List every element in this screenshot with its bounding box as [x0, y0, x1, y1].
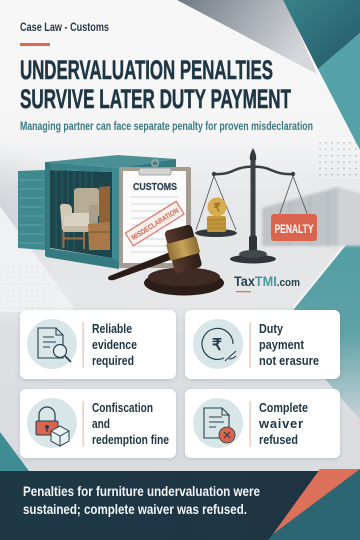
label	[258, 400, 308, 447]
label: Reliable	[92, 321, 132, 336]
coins: ₹	[214, 202, 220, 214]
card: reliable evidence	[20, 310, 176, 379]
label: payment	[259, 337, 305, 352]
gavel	[108, 224, 224, 296]
label: refused	[259, 432, 298, 447]
label: required	[92, 353, 134, 368]
warehouse backdrop	[262, 187, 360, 246]
label	[259, 321, 319, 368]
label: not erasure	[259, 353, 319, 368]
label	[92, 400, 169, 447]
footer text: Penalties for furniture undervaluation were	[23, 483, 260, 499]
icon: rupee circle	[193, 319, 243, 369]
penalty sign: PENALTY	[274, 224, 314, 236]
dot pattern	[315, 141, 358, 181]
misdeclaration stamp: MISDECLARATION	[130, 206, 180, 242]
label: Duty	[259, 321, 284, 336]
armchair	[60, 188, 99, 249]
card: waiver refused	[185, 389, 340, 458]
label: waiver	[258, 416, 303, 431]
footer text	[23, 483, 260, 517]
icon: document with cross	[193, 398, 243, 448]
title	[20, 55, 291, 114]
accent bar	[20, 43, 50, 46]
label: evidence	[92, 337, 137, 352]
label	[92, 321, 137, 368]
wooden cabinet	[88, 186, 110, 250]
icon: rupee circle: ₹	[212, 337, 222, 354]
footer text: sustained; complete waiver was refused.	[23, 501, 247, 517]
label: redemption fine	[92, 432, 169, 447]
icon: lock and box	[27, 398, 77, 448]
TaxTMI logo: TaxTMI.com	[234, 273, 300, 289]
label: Complete	[259, 400, 308, 415]
label: and	[92, 416, 110, 431]
footer band	[0, 469, 360, 540]
card: confiscation	[20, 389, 176, 458]
icon: document with magnifier	[27, 319, 77, 369]
card: duty payment	[185, 310, 340, 379]
balance scale	[195, 148, 317, 264]
shipping container	[18, 155, 176, 269]
clipboard: CUSTOMS	[133, 182, 177, 193]
kicker: Case Law - Customs	[20, 22, 109, 34]
label: Confiscation	[92, 400, 153, 415]
clipboard	[119, 160, 191, 268]
